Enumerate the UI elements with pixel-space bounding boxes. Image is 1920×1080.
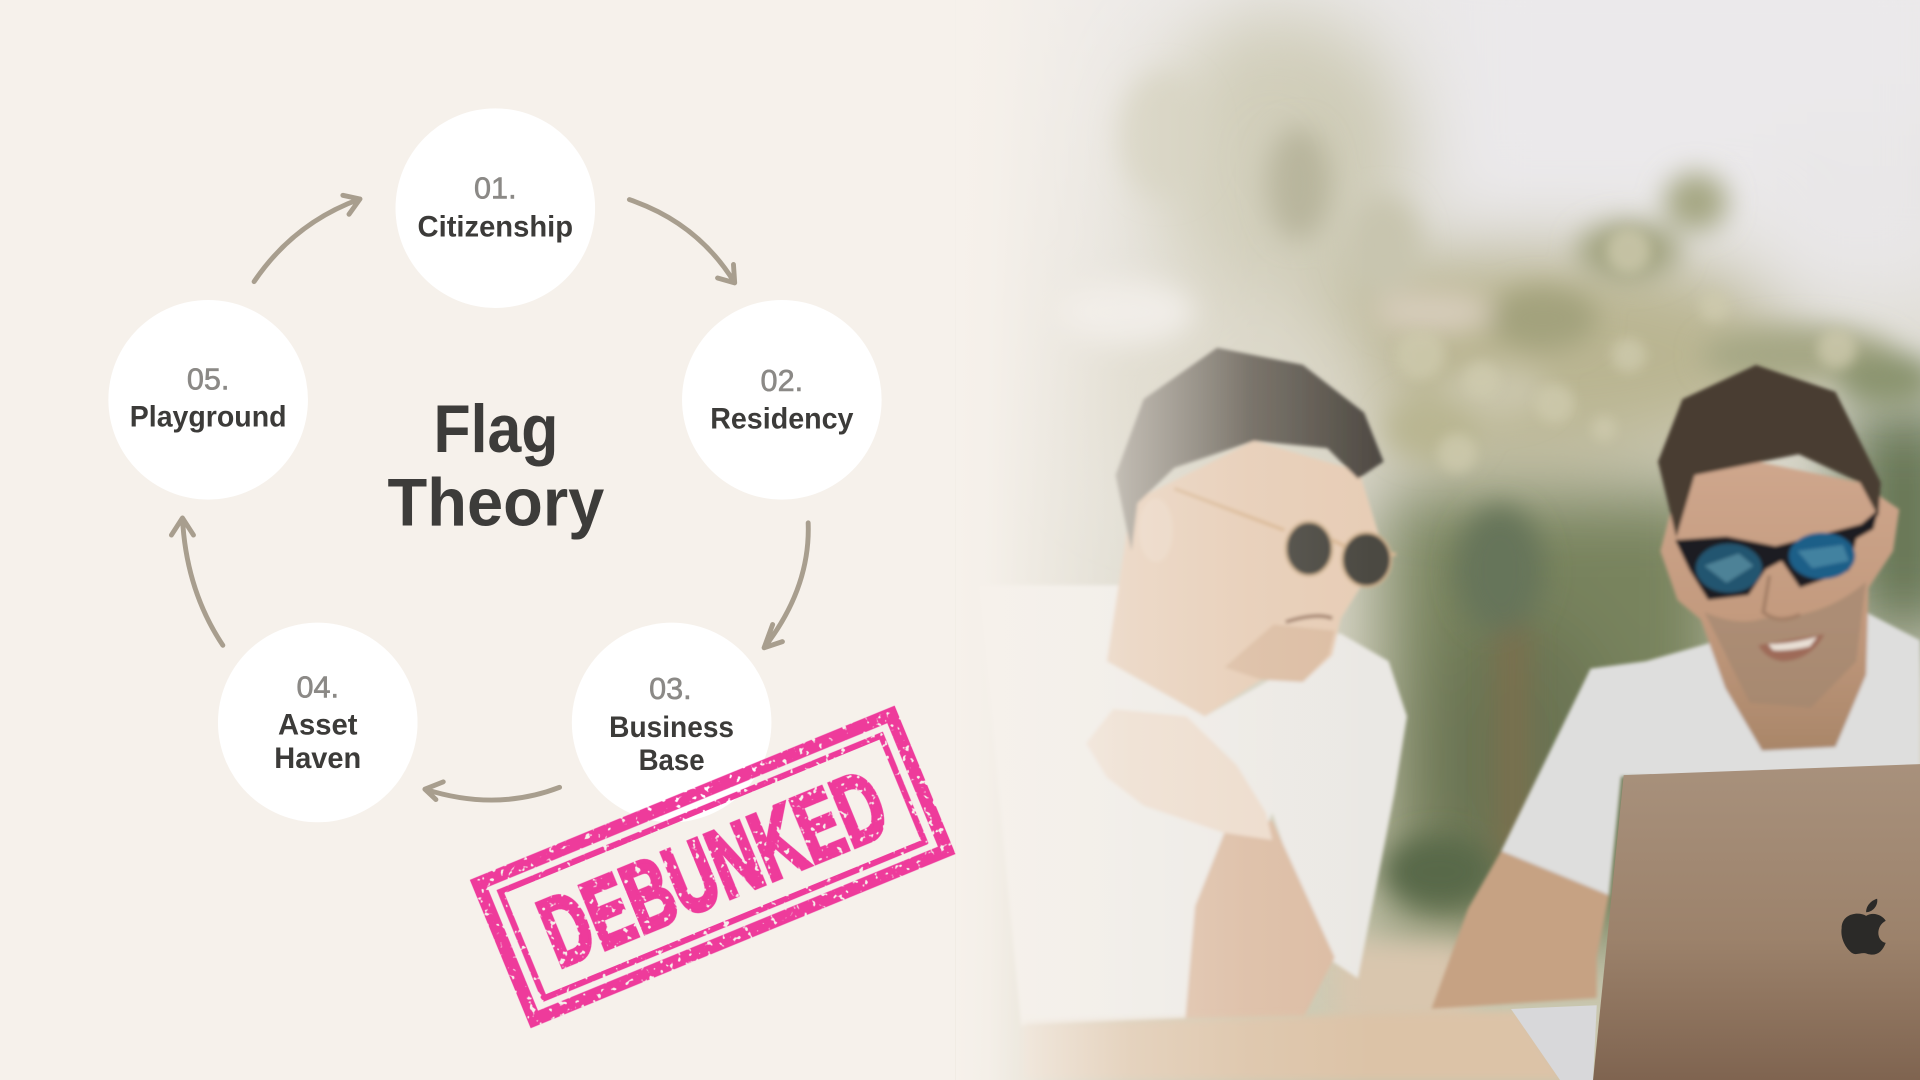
stubble xyxy=(1704,582,1866,708)
diagram: Flag Theory cycle xyxy=(108,108,882,822)
neck and face xyxy=(1107,441,1380,716)
mouth xyxy=(1758,634,1824,661)
node 03: Business Base xyxy=(572,623,771,822)
hand xyxy=(1086,709,1272,840)
node 03: Business Base: Base xyxy=(639,744,705,777)
hair xyxy=(1116,348,1384,551)
hair xyxy=(1658,365,1881,538)
node 04: Asset Haven xyxy=(218,623,418,822)
node 01: Citizenship: 01. xyxy=(474,171,517,205)
laptop lid xyxy=(1593,764,1920,1080)
neck and face xyxy=(1660,453,1899,751)
node 02: Residency: 02. xyxy=(761,364,803,398)
laptop xyxy=(1511,764,1920,1080)
node 04: Asset Haven: 04. xyxy=(296,670,339,704)
sunglasses xyxy=(1675,509,1878,600)
glasses xyxy=(1174,489,1396,587)
stamp inner border xyxy=(500,736,925,998)
person left: man with round sunglasses xyxy=(978,348,1407,1026)
laptop base xyxy=(1511,1005,1597,1080)
arm xyxy=(1431,851,1609,1009)
apple logo xyxy=(1841,899,1886,955)
left fade of the photo into the cream background xyxy=(955,0,1322,1080)
node 04: Asset Haven: Asset xyxy=(278,709,358,742)
node 02: Residency xyxy=(682,300,882,500)
arrow: 01 to 02 xyxy=(629,200,735,283)
arrow: 03 to 04 xyxy=(425,782,560,800)
node 01: Citizenship xyxy=(396,108,595,308)
arrow: 02 to 03 xyxy=(764,523,808,648)
arrow: 04 to 05 xyxy=(171,518,223,645)
arm xyxy=(1185,820,1335,1019)
node 04: Asset Haven: Haven xyxy=(274,742,361,775)
arrow: 05 to 01 xyxy=(254,195,360,282)
node 03: Business Base: Business xyxy=(609,711,734,744)
photo: two men with sunglasses at a laptop xyxy=(955,0,1920,1080)
stamp: DEBUNKED xyxy=(479,714,947,1019)
person right: man with blue sunglasses xyxy=(1431,365,1920,1009)
mouth shadow xyxy=(1286,616,1332,622)
nose shadow xyxy=(1763,576,1800,619)
title: Flag Theory: Flag xyxy=(433,392,558,467)
table xyxy=(1022,1011,1565,1080)
shirt xyxy=(978,585,1407,1026)
node 05: Playground: Playground xyxy=(130,401,287,434)
foliage bokeh highlights xyxy=(1396,229,1856,473)
node 05: Playground: 05. xyxy=(187,362,229,396)
node 03: Business Base: 03. xyxy=(649,672,692,706)
photo backdrop: blurred sky and foliage xyxy=(955,0,1920,1080)
stamp text: DEBUNKED xyxy=(525,749,902,988)
ear xyxy=(1139,498,1173,562)
shirt xyxy=(1501,612,1920,895)
node 02: Residency: Residency xyxy=(710,403,854,436)
cheek shadow xyxy=(1224,624,1335,682)
title: Flag Theory xyxy=(388,392,605,540)
stamp outer border xyxy=(479,714,947,1019)
title: Flag Theory: Theory xyxy=(388,465,605,540)
node 01: Citizenship: Citizenship xyxy=(418,210,573,243)
node 05: Playground xyxy=(108,300,308,500)
